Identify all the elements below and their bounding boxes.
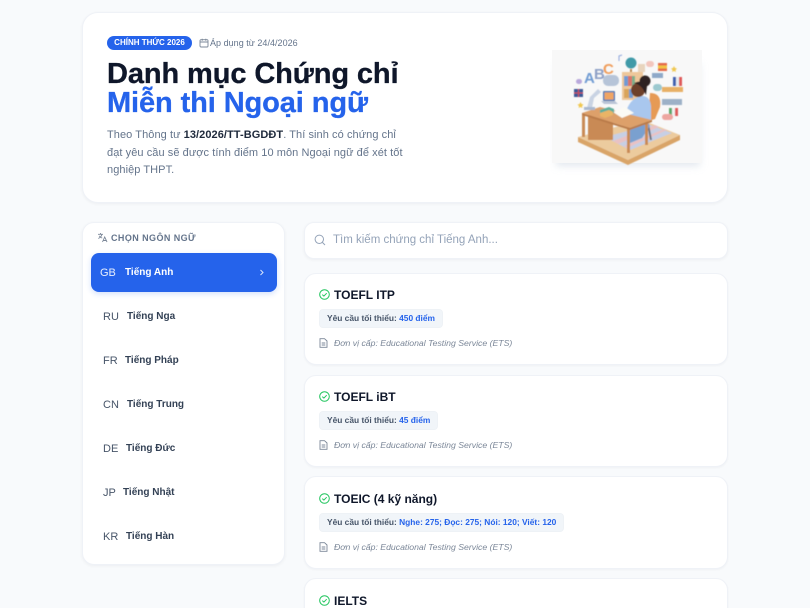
card: IELTS bbox=[304, 578, 728, 608]
books bbox=[600, 107, 614, 116]
requirement bbox=[319, 411, 438, 430]
icon: document bbox=[320, 338, 328, 348]
item: Russian bbox=[103, 311, 176, 323]
item: English active: GB bbox=[100, 267, 116, 279]
requirement bbox=[319, 513, 564, 532]
card: TOEFL iBT bbox=[304, 375, 728, 467]
item: French bbox=[103, 355, 179, 367]
globe bbox=[626, 58, 636, 68]
panel: header bbox=[82, 12, 728, 203]
icon: search bbox=[314, 234, 326, 246]
icon: translate bbox=[98, 233, 108, 242]
icon: check bbox=[319, 289, 330, 300]
title bbox=[107, 58, 398, 119]
description: Theo Thông tư 13/2026/TT-BGDĐT. Thí sinh có chứng chỉ bbox=[107, 129, 396, 141]
rug bbox=[605, 125, 672, 150]
description: đạt yêu cầu sẽ được tính điểm 10 môn Ngoại ngữ để xét tốt bbox=[107, 147, 403, 159]
heading: choose language: CHỌN NGÔN NGỮ bbox=[111, 233, 196, 243]
icon: check bbox=[319, 391, 330, 402]
search box bbox=[304, 222, 728, 259]
language list bbox=[88, 252, 280, 543]
item: Japanese: Tiếng Nhật bbox=[123, 487, 174, 498]
item: Japanese: JP bbox=[103, 487, 116, 499]
word tags bbox=[652, 73, 663, 78]
platform bbox=[578, 120, 680, 160]
item: German bbox=[103, 443, 175, 455]
lamp bbox=[587, 89, 601, 108]
item: Chinese bbox=[103, 399, 184, 411]
icon: check bbox=[319, 493, 330, 504]
flags bbox=[574, 89, 583, 97]
badge: official 2026 bbox=[107, 36, 192, 50]
item: Japanese bbox=[103, 487, 174, 499]
icon: document bbox=[320, 440, 328, 450]
issuer: Đơn vị cấp: Educational Testing Service (ETS) bbox=[334, 542, 512, 552]
search placeholder: Tìm kiếm chứng chỉ Tiếng Anh... bbox=[333, 234, 498, 246]
item: Russian: Tiếng Nga bbox=[127, 311, 175, 322]
illustration: student at desk bbox=[555, 54, 702, 168]
badge: official 2026: CHÍNH THỨC 2026 bbox=[114, 38, 185, 47]
item: French: Tiếng Pháp bbox=[125, 355, 179, 366]
description: nghiệp THPT. bbox=[107, 164, 174, 176]
item: Chinese: Tiếng Trung bbox=[127, 399, 184, 410]
item: Korean: Tiếng Hàn bbox=[126, 531, 174, 542]
illustration: student at desk: B bbox=[594, 66, 605, 83]
illustration: student at desk: C bbox=[603, 61, 614, 78]
item: German: DE bbox=[103, 443, 118, 455]
title: Miễn thi Ngoại ngữ bbox=[107, 87, 368, 119]
requirement: Yêu cầu tối thiểu: 450 điểm bbox=[327, 313, 435, 323]
card title: IELTS bbox=[334, 594, 367, 608]
desk bbox=[588, 115, 613, 140]
laptop bbox=[603, 91, 615, 101]
item: German: Tiếng Đức bbox=[126, 443, 175, 454]
requirement bbox=[319, 309, 443, 328]
card: TOEIC bbox=[304, 476, 728, 569]
item: Chinese: CN bbox=[103, 399, 119, 411]
requirement: Yêu cầu tối thiểu: 45 điểm bbox=[327, 415, 430, 425]
item: English active bbox=[91, 253, 277, 292]
title: Danh mục Chứng chỉ bbox=[107, 58, 398, 90]
item: Korean bbox=[103, 531, 174, 543]
card title: TOEFL ITP bbox=[334, 288, 395, 302]
icon: calendar bbox=[200, 38, 208, 48]
description bbox=[107, 129, 403, 176]
icon: check bbox=[319, 595, 330, 606]
panel: language selector bbox=[82, 222, 285, 565]
card title: TOEFL iBT bbox=[334, 390, 396, 404]
effective date: Áp dụng từ 24/4/2026 bbox=[210, 38, 298, 48]
issuer: Đơn vị cấp: Educational Testing Service (ETS) bbox=[334, 338, 512, 348]
card title: TOEIC (4 kỹ năng) bbox=[334, 492, 437, 506]
paper bbox=[613, 107, 634, 118]
speech bubbles bbox=[603, 75, 619, 86]
letters ABC: A bbox=[584, 70, 595, 87]
item: French: FR bbox=[103, 355, 118, 367]
requirement: Yêu cầu tối thiểu: Nghe: 275; Đọc: 275; Nói: 120; Viết: 120 bbox=[327, 517, 556, 527]
item: Russian: RU bbox=[103, 311, 119, 323]
item: English active: Tiếng Anh bbox=[125, 267, 173, 278]
person bbox=[628, 120, 650, 143]
item: Korean: KR bbox=[103, 531, 118, 543]
icon: document bbox=[320, 542, 328, 552]
issuer: Đơn vị cấp: Educational Testing Service (ETS) bbox=[334, 440, 512, 450]
chair bbox=[648, 93, 660, 121]
card: TOEFL ITP bbox=[304, 273, 728, 365]
bookshelf bbox=[622, 72, 643, 100]
